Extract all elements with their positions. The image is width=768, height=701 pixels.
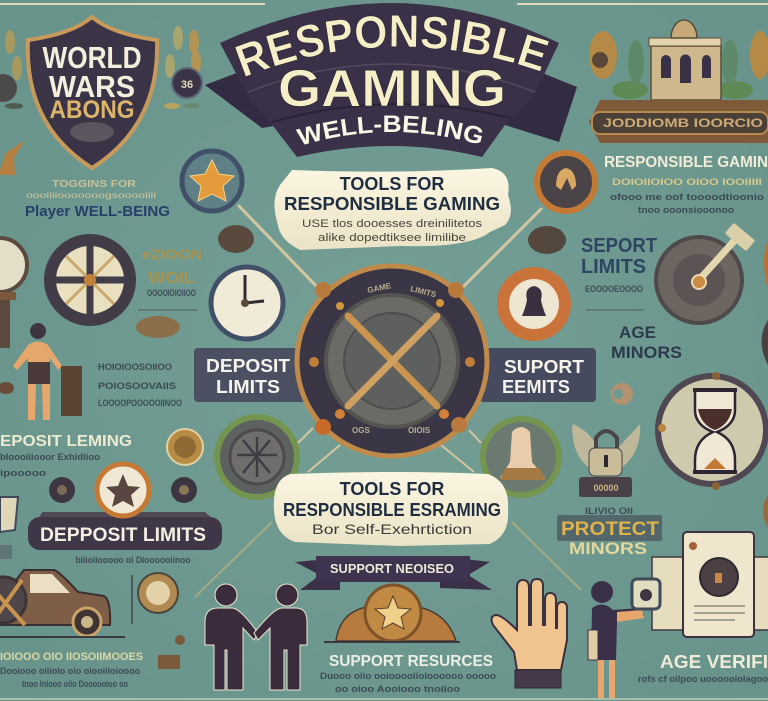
- icon: winged padlock: [572, 424, 640, 497]
- heading: deposit leming: ipooooo: [0, 468, 47, 478]
- heading: seport limits: SEPORT: [581, 235, 657, 257]
- right text block: responsible gaming: ofooo me oof toooodtioonio: [610, 192, 765, 202]
- text block bottom left: IOIOOO OIO IIOSOIIMOOES: [0, 651, 143, 663]
- callout top: RESPONSIBLE GAMING: [284, 194, 500, 214]
- icon: support medal: [324, 585, 460, 643]
- ribbon: support resources: [295, 556, 492, 590]
- callout top: TOOLS FOR: [340, 174, 444, 194]
- heading: seport limits: EOOOOEOOOO: [585, 284, 643, 294]
- ribbon: support resources: SUPPORT NEOISEO: [330, 561, 454, 576]
- right text block: responsible gaming: [604, 154, 768, 215]
- icon: two people holding hands: [205, 584, 307, 690]
- building icon: [589, 20, 768, 143]
- label: deposit limits: LIMITS: [216, 377, 280, 397]
- callout bottom: RESPONSIBLE ESRAMING: [283, 500, 501, 520]
- heading: age verification: [638, 652, 768, 684]
- text block bottom left: Dooiooo oiiiolo oio oiooiiioioooo: [0, 666, 140, 676]
- deposit limits bar with star badge: DEPPOSIT LIMITS: [40, 525, 206, 546]
- text block left centre: POIOSOOVAIIS: [98, 381, 176, 391]
- heading: support resources: SUPPORT RESURCES: [329, 653, 493, 670]
- title ribbon: WELL-BELING: [296, 116, 482, 144]
- title ribbon: GAMING: [278, 60, 506, 118]
- green ring left: [217, 417, 297, 497]
- label: support limits: EEMITS: [502, 377, 570, 397]
- callout top: [274, 168, 511, 250]
- heading: deposit leming: EPOSIT LEMING: [0, 433, 132, 450]
- shield badge: ABONG: [50, 96, 134, 124]
- coin with glyphs: [132, 573, 178, 624]
- right edge fragments: [762, 240, 768, 528]
- deposit limits bar with star badge: [28, 464, 222, 565]
- callout bottom: Bor Self-Exehrtiction: [312, 521, 472, 537]
- icon: raised hand: [492, 579, 567, 688]
- text block left centre: [98, 362, 182, 408]
- connector lines: [195, 205, 581, 597]
- central wheel: OIOIS: [408, 426, 431, 435]
- heading: deposit leming: [0, 433, 132, 478]
- small snail ornament: [611, 383, 633, 405]
- laurel and small badge right of shield: 36: [181, 79, 193, 91]
- callout bottom: [274, 472, 508, 546]
- deposit limits bar with star badge: biiioiiooooo oi Dioooooiinoo: [76, 555, 191, 565]
- small ornaments around centre: eZIOON: [142, 246, 202, 262]
- laurel left of shield: [0, 30, 25, 175]
- label: protect minors: MINORS: [569, 539, 647, 558]
- green ring right: [483, 419, 559, 495]
- small ornaments around centre: OOOOIOIOIIOO: [147, 288, 196, 298]
- label: protect minors: PROTECT: [561, 519, 659, 540]
- title text: RESPONSIBLE: [234, 15, 550, 77]
- heading: age verification: AGE VERIFI: [660, 652, 768, 672]
- label: deposit limits: [194, 348, 309, 402]
- card fragments at left: [0, 497, 18, 559]
- left text block: player well-being: Player WELL-BEING: [25, 203, 170, 220]
- text block left centre: HOIOIOOSOIIOO: [98, 362, 172, 372]
- heading: support resources: Duooo oiio ooiooooiioioooooo ooooo: [320, 671, 497, 681]
- shield badge: WARS: [49, 69, 135, 104]
- icon: star circle: [182, 151, 242, 211]
- icon: id cards with lock: [652, 532, 768, 637]
- heading: age verification: rofs cf oilpoo uoooooiolagoo: [638, 674, 768, 684]
- icon: compass wheel: [44, 234, 136, 326]
- left text block: player well-being: oooiiiiooooooogsooooiiii: [26, 191, 156, 200]
- central wheel: OGS: [352, 426, 370, 435]
- label: support limits: [480, 348, 596, 402]
- heading: age minors: [611, 323, 682, 362]
- right text block: responsible gaming: tnoo ooonsiooonoo: [638, 205, 735, 215]
- shield badge: [28, 17, 157, 168]
- text block bottom left: [0, 651, 143, 689]
- icon: clock centre left: [211, 267, 283, 339]
- central wheel: LIMITS: [410, 284, 438, 299]
- shield badge: WORLD: [42, 40, 142, 75]
- callout top: alike dopedtiksee limilibe: [318, 232, 466, 244]
- text block left centre: LOOOOPOOOOOIINOO: [98, 398, 182, 408]
- callout top: USE tlos dooesses dreinilitetos: [302, 218, 483, 230]
- building icon: JODDIOMB IOORCIO: [603, 116, 763, 130]
- title ribbon: [205, 3, 577, 157]
- heading: seport limits: LIMITS: [581, 256, 646, 278]
- left text block: player well-being: [25, 179, 170, 220]
- heading: support resources: oo oioo Aooiooo tnoiioo: [335, 684, 461, 694]
- laurel and small badge right of shield: [164, 26, 202, 109]
- right text block: responsible gaming: DOIOIIOIOO OIOO IOOIIIII: [612, 177, 762, 187]
- callout bottom: TOOLS FOR: [340, 479, 444, 499]
- heading: deposit leming: bloooiiiooor Exhidiioo: [0, 452, 101, 462]
- icon: car: [0, 570, 125, 638]
- central wheel: GAME: [367, 281, 393, 295]
- label: protect minors: ILIVIO OII: [585, 506, 633, 516]
- icon: winged padlock: 00000: [593, 483, 619, 493]
- heading: age minors: AGE: [619, 323, 656, 342]
- icon: hammer dial: [656, 223, 755, 323]
- coin icon: [167, 429, 203, 465]
- small dark dots: [49, 477, 197, 503]
- icon: person with card: [588, 579, 660, 698]
- small ornaments around centre: [136, 225, 566, 338]
- heading: support resources: [320, 653, 497, 694]
- central wheel: [297, 266, 487, 456]
- heading: seport limits: [581, 235, 657, 310]
- icon: left clock with handle: [0, 238, 27, 348]
- icon: hourglass: [658, 372, 766, 490]
- icon: orange badge top right: [537, 153, 595, 211]
- label: deposit limits: DEPOSIT: [206, 356, 290, 376]
- text block bottom left: tnoo Iniooo oiio Doooooioo oo: [22, 679, 128, 689]
- icon: orange keyhole badge: [497, 267, 571, 341]
- label: protect minors: [557, 506, 662, 558]
- left text block: player well-being: TOGGINS FOR: [52, 179, 137, 190]
- heading: age minors: MINORS: [611, 343, 682, 362]
- small ornament bottom: [158, 635, 185, 669]
- icon: person with panel: [0, 323, 82, 420]
- small ornaments around centre: WOIL: [148, 270, 195, 287]
- label: support limits: SUPORT: [504, 357, 584, 377]
